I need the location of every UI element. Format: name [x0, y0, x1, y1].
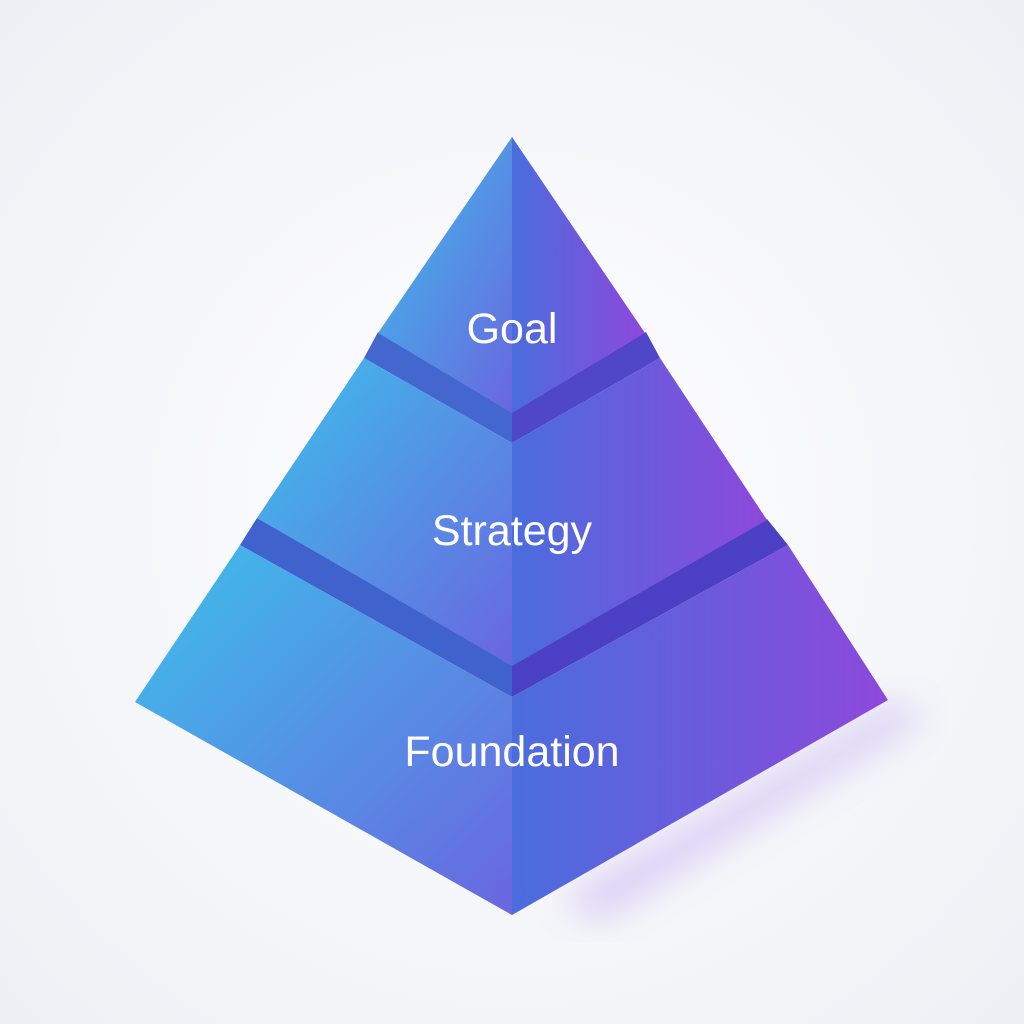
tier: goal: [378, 137, 645, 413]
shadow: [560, 700, 920, 920]
label: Strategy: Strategy: [432, 507, 593, 555]
tier: strategy: [257, 332, 767, 666]
label: Foundation: Foundation: [404, 728, 620, 776]
tier: foundation: [135, 518, 888, 915]
label: Goal: Goal: [467, 305, 557, 353]
